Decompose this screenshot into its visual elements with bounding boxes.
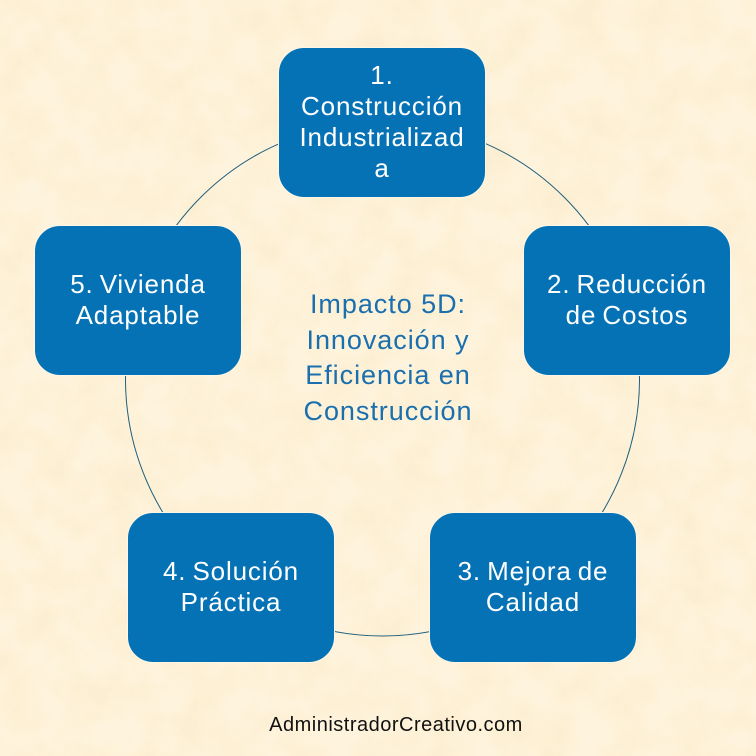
node 1: Construcción Industrializada: Industrializad — [299, 122, 465, 152]
node 4: Solución Práctica — [127, 512, 335, 663]
node 3: Mejora de Calidad — [429, 512, 637, 663]
node 3: Mejora de Calidad: 3. Mejora de — [458, 556, 608, 586]
node 2: Reducción de Costos: de Costos — [566, 300, 688, 330]
central title: Eficiencia en — [305, 360, 471, 390]
node 1: Construcción Industrializada: Construcción — [301, 90, 463, 120]
central title: Innovación y — [306, 324, 470, 354]
node 2: Reducción de Costos — [523, 225, 731, 376]
node 5: Vivienda Adaptable: Adaptable — [76, 300, 200, 330]
node 1: Construcción Industrializada: a — [374, 152, 390, 182]
central title — [304, 289, 472, 426]
node 5: Vivienda Adaptable — [34, 225, 242, 376]
node 4: Solución Práctica: 4. Solución — [163, 556, 299, 586]
node 4: Solución Práctica: Práctica — [181, 586, 281, 616]
node 2: Reducción de Costos: 2. Reducción — [547, 268, 707, 298]
node 5: Vivienda Adaptable: 5. Vivienda — [70, 268, 206, 298]
node 1: Construcción Industrializada — [278, 47, 486, 198]
node 1: Construcción Industrializada: 1. — [370, 60, 394, 90]
node 3: Mejora de Calidad: Calidad — [486, 586, 580, 616]
website credit: AdministradorCreativo.com — [269, 714, 523, 736]
central title: Impacto 5D: — [310, 289, 466, 319]
central title: Construcción — [304, 396, 472, 426]
